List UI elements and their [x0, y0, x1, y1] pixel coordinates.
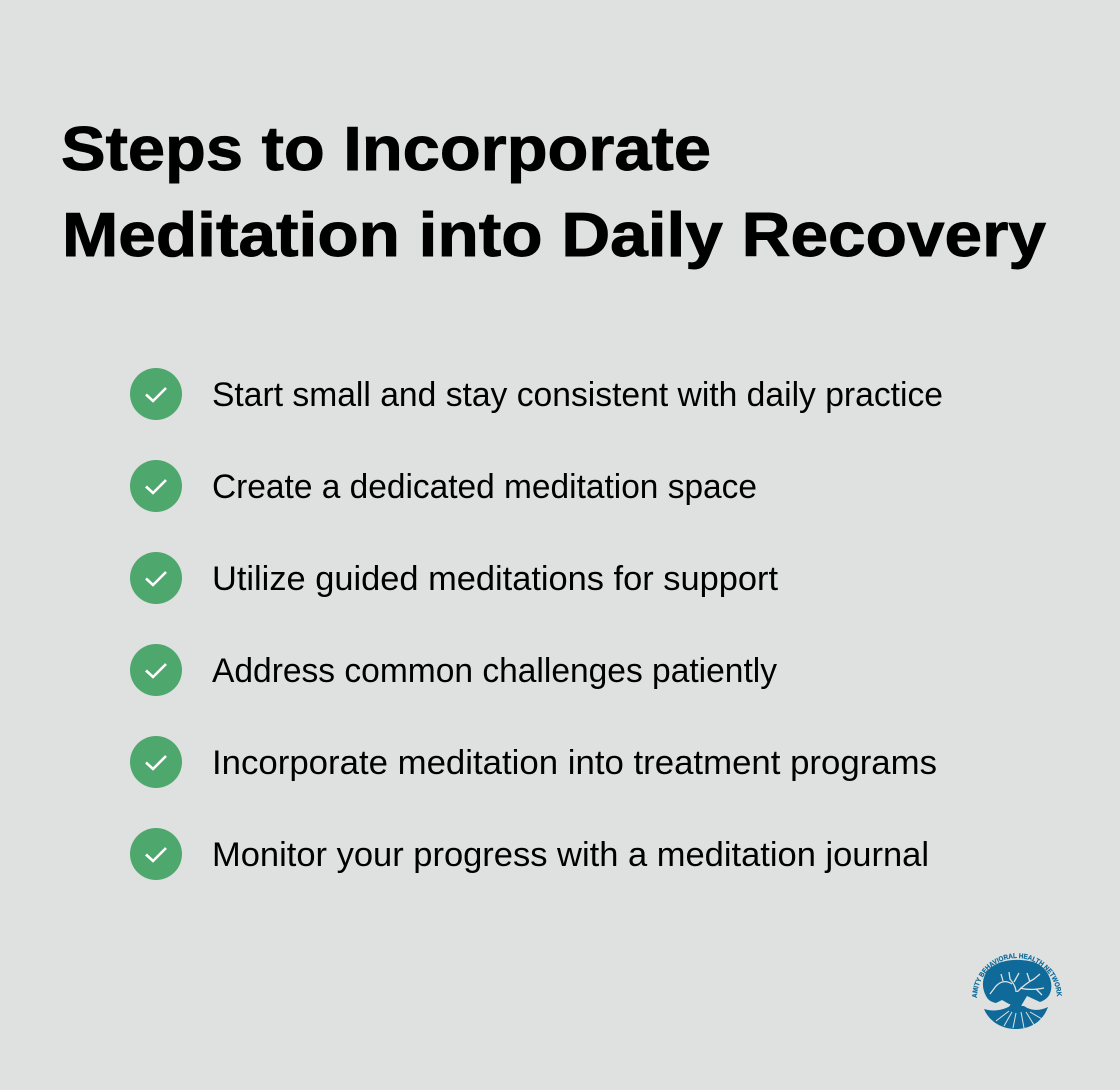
item 4: Address common challenges patiently [212, 652, 777, 690]
logo tree canopy [983, 960, 1051, 1006]
item 1 [130, 368, 943, 420]
checklist [130, 368, 943, 880]
title: Steps to Incorporate [61, 115, 711, 184]
item 5: Incorporate meditation into treatment programs [212, 744, 937, 782]
item 2 [130, 460, 757, 512]
item 2: Create a dedicated meditation space [212, 468, 757, 506]
logo roots [996, 1011, 1042, 1028]
logo ring text: AMITY BEHAVIORAL HEALTH NETWORK [972, 953, 1062, 998]
item 6 [130, 828, 929, 880]
title: Meditation into Daily Recovery [62, 201, 1047, 270]
logo: Amity Behavioral Health Network tree [972, 953, 1062, 1029]
item 5 [130, 736, 937, 788]
logo tree trunk [1007, 992, 1024, 1010]
title [61, 115, 1047, 270]
item 6: Monitor your progress with a meditation journal [212, 836, 929, 874]
item 3 [130, 552, 779, 604]
logo root bowl [984, 1006, 1048, 1029]
item 3: Utilize guided meditations for support [212, 560, 779, 598]
item 4 [130, 644, 777, 696]
item 1: Start small and stay consistent with daily practice [212, 376, 943, 414]
logo tree branches [990, 972, 1044, 998]
